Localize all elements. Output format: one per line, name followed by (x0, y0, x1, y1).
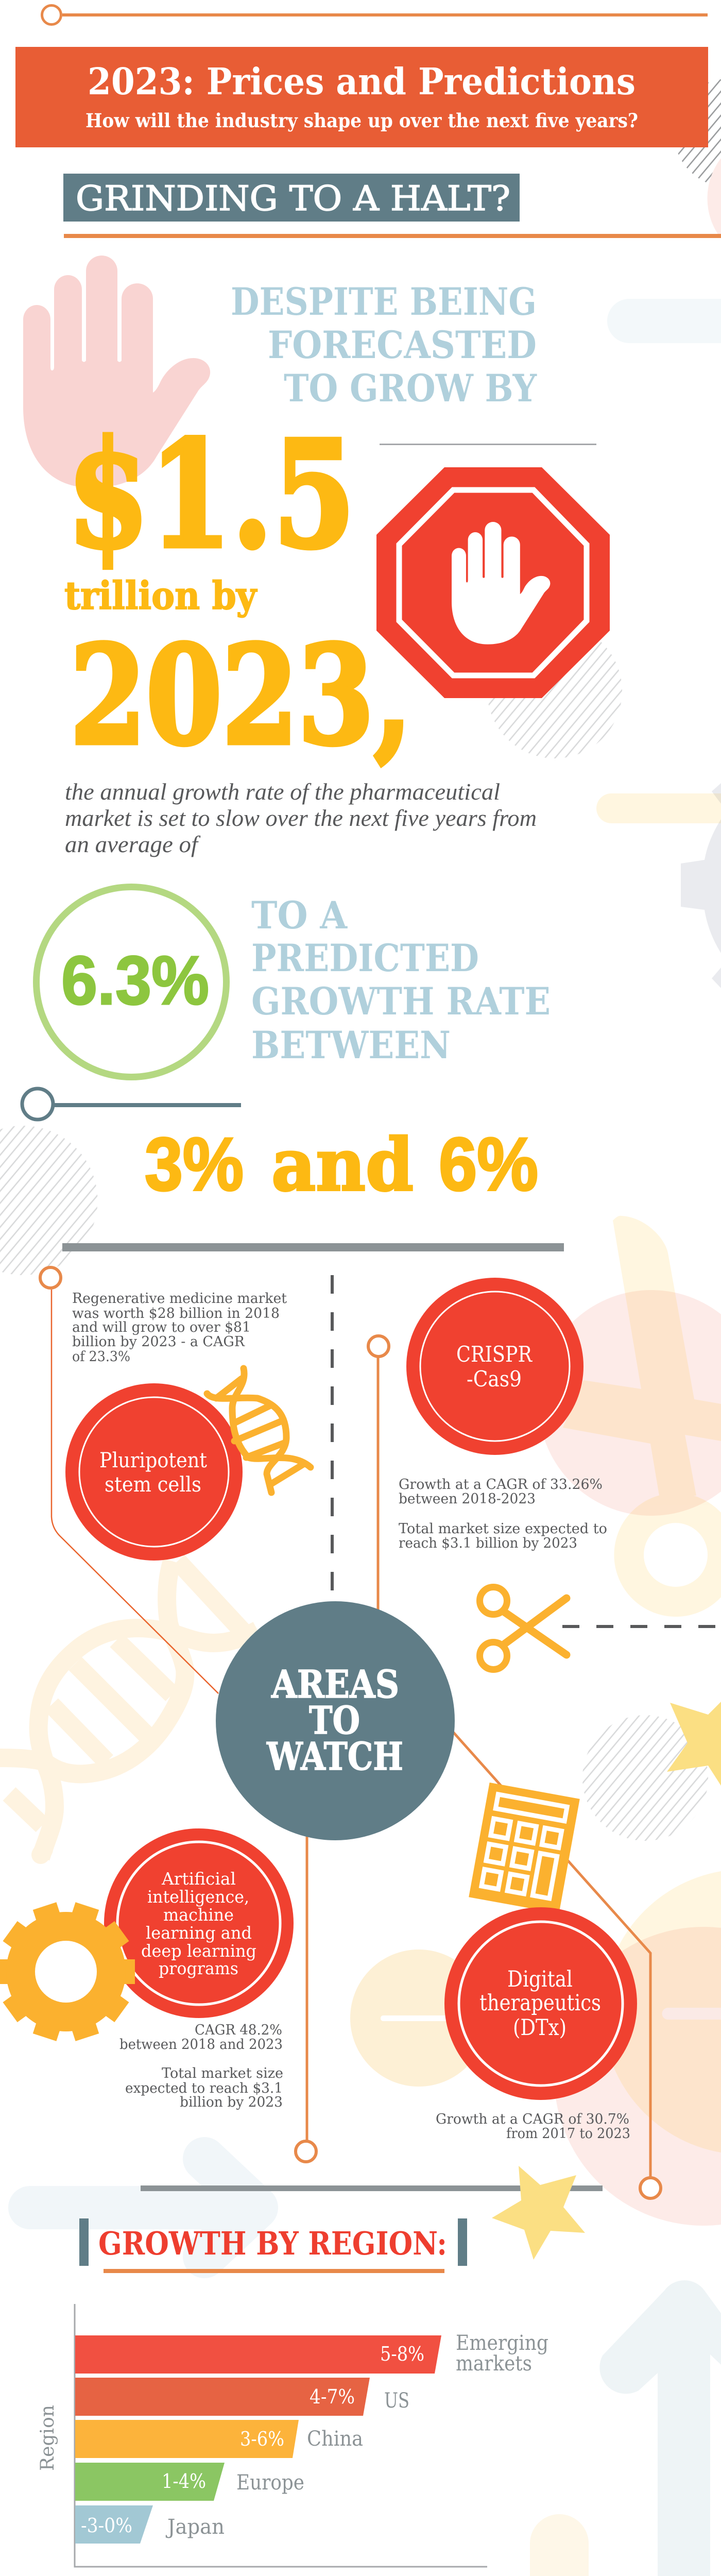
stat: 6.3% in green ring (36, 887, 227, 1077)
circle: artificial intelligence: machine (163, 1905, 234, 1925)
circle: artificial intelligence: learning and (146, 1923, 252, 1943)
text: regenerative medicine: of 23.3% (72, 1349, 130, 1365)
text: regenerative medicine: billion by 2023 - a CAGR (72, 1334, 245, 1350)
icon: yellow star (492, 2166, 585, 2260)
background: pale blue arrow right-pointing (30, 2159, 256, 2257)
circle: pluripotent stem cells (65, 1383, 243, 1561)
background: pale yellow capsule (596, 793, 721, 823)
connector: AI to centre (296, 1837, 316, 2162)
text: annual growth rate paragraph: the annual growth rate of the pharmaceutical (65, 778, 500, 805)
text: annual growth rate paragraph: an average of (65, 831, 201, 857)
chart axes (75, 2304, 487, 2567)
big number: $1.5: $1.5 (67, 409, 355, 581)
bar: China (75, 2420, 363, 2458)
grey section bar (62, 1243, 564, 1251)
text: regenerative medicine: was worth $28 billion in 2018 (72, 1306, 280, 1321)
background: hatched circle under stop sign (487, 623, 622, 758)
text: CRISPR growth: Growth at a CAGR of 33.26% (399, 1477, 603, 1493)
text: to a predicted growth rate between (251, 893, 551, 1067)
circle: artificial intelligence: programs (159, 1958, 238, 1978)
text: AI market: Total market size (162, 2065, 283, 2081)
text: regenerative medicine: and will grow to over $81 (72, 1319, 251, 1335)
bar: Japan: Japan (165, 2515, 225, 2539)
text: AI market: between 2018 and 2023 (119, 2037, 283, 2053)
bar: US: 4-7% (310, 2385, 355, 2408)
background: pale yellow down arrow (494, 2544, 626, 2576)
background: large pale DNA helix (0, 1561, 258, 1858)
circle: digital therapeutics (444, 1907, 637, 2100)
background: pale blue up arrow (599, 2280, 721, 2576)
text: to a predicted growth rate between: TO A (251, 893, 348, 938)
section heading: grinding to a halt: GRINDING TO A HALT? (76, 179, 510, 218)
background: pale blue capsule (607, 299, 721, 343)
text: digital therapeutics growth (436, 2111, 630, 2142)
bar: emerging markets: Emerging (456, 2331, 548, 2355)
text: trillion by: trillion by (64, 574, 258, 618)
text: despite being forecasted to grow by: DESPITE BEING (231, 280, 537, 324)
grey section bar (141, 2185, 603, 2191)
circle: areas to watch: TO (309, 1699, 360, 1743)
circle: pluripotent stem cells: Pluripotent (99, 1449, 207, 1472)
circle: digital therapeutics: Digital (507, 1967, 573, 1992)
text: digital therapeutics growth: from 2017 to 2023 (506, 2126, 630, 2142)
bar: US (75, 2378, 409, 2416)
bar: Europe (75, 2463, 304, 2501)
stat: 3% and 6%: and (271, 1123, 414, 1208)
background: yellow star right edge (667, 1702, 721, 1786)
title banner (15, 47, 708, 147)
heading: growth by region: GROWTH BY REGION: (98, 2225, 447, 2262)
text: AI market (119, 2022, 283, 2110)
background: hatched circle left (0, 1126, 98, 1275)
bar: Japan (75, 2505, 225, 2544)
background: hatched circle right (582, 1715, 708, 1841)
icon: big pale hand (23, 256, 210, 488)
connector: digital therapeutics to centre (453, 1732, 661, 2198)
text: to a predicted growth rate between: GROWTH RATE (251, 979, 551, 1024)
circle: areas to watch (216, 1601, 455, 1840)
short grey rule (380, 444, 596, 445)
background: large pale scissors (563, 1216, 721, 1617)
text: despite being forecasted to grow by (231, 280, 537, 411)
text: AI market: CAGR 48.2% (195, 2022, 282, 2038)
teal ring and rule (22, 1089, 241, 1120)
text: digital therapeutics growth: Growth at a CAGR of 30.7% (436, 2111, 629, 2127)
connector: pluripotent to centre (40, 1267, 218, 1693)
title: 2023: Prices and Predictions (88, 60, 636, 103)
text: AI market: billion by 2023 (180, 2094, 283, 2110)
circle: CRISPR-Cas9: CRISPR (456, 1342, 533, 1367)
text: CRISPR growth (399, 1477, 607, 1551)
bar: China: China (307, 2427, 363, 2451)
vertical dashed divider (331, 1275, 334, 1592)
icon: scissors (480, 1587, 566, 1669)
icon: gear (0, 1902, 135, 2041)
bar: emerging markets: markets (456, 2352, 532, 2376)
text: despite being forecasted to grow by: TO GROW BY (284, 366, 537, 411)
bar: emerging markets: 5-8% (380, 2343, 424, 2365)
background: grey gear right (681, 783, 721, 988)
circle: artificial intelligence (104, 1828, 294, 2018)
text: to a predicted growth rate between: PREDICTED (251, 936, 479, 980)
stat: 6.3% in green ring: 6.3% (61, 942, 209, 1019)
background: overlapping yellow and pink circles (554, 1871, 721, 2226)
bar: US: US (384, 2389, 409, 2413)
heading: growth by region (79, 2218, 467, 2273)
stat: 3% and 6%: 3% (145, 1122, 244, 1206)
text: regenerative medicine (72, 1291, 287, 1365)
circle: areas to watch: AREAS (271, 1663, 399, 1707)
icon: stop sign with hand (376, 467, 610, 698)
stat: 3% and 6%: 6% (439, 1122, 538, 1206)
icon: DNA (207, 1368, 311, 1493)
circle: digital therapeutics: (DTx) (513, 2015, 566, 2041)
circle: pluripotent stem cells: stem cells (105, 1473, 201, 1497)
background: pink circle top right (707, 158, 721, 239)
text: CRISPR growth: reach $3.1 billion by 2023 (399, 1535, 577, 1551)
bar: Europe: 1-4% (162, 2470, 206, 2493)
text: despite being forecasted to grow by: FORECASTED (268, 323, 537, 367)
text: AI market: expected to reach $3.1 (125, 2080, 283, 2096)
subtitle: How will the industry shape up over the next five years? (85, 109, 638, 132)
text: annual growth rate paragraph (65, 778, 537, 857)
text: annual growth rate paragraph: market is set to slow over the next five years from (65, 805, 537, 831)
bar chart: growth by region (37, 2304, 548, 2576)
bar: Japan: -3-0% (81, 2514, 132, 2537)
text: to a predicted growth rate between: BETWEEN (251, 1023, 451, 1067)
big number: 2023: 2023, (70, 616, 412, 775)
horizontal dashes (562, 1625, 721, 1628)
bar: emerging markets (75, 2331, 548, 2376)
connector: CRISPR to centre (368, 1336, 389, 1610)
bar: China: 3-6% (240, 2428, 284, 2450)
bar: Europe: Europe (236, 2471, 304, 2495)
circle: artificial intelligence: intelligence, (147, 1887, 249, 1907)
section heading: grinding to a halt (63, 174, 721, 238)
text: CRISPR growth: between 2018-2023 (399, 1491, 536, 1507)
background: pink circle by CRISPR (538, 1290, 721, 1516)
icon: calculator (469, 1783, 580, 1913)
circle: artificial intelligence: Artificial (161, 1869, 236, 1889)
text: regenerative medicine: Regenerative medicine market (72, 1291, 287, 1307)
circle: areas to watch: WATCH (266, 1735, 403, 1779)
circle: artificial intelligence: deep learning (141, 1941, 256, 1961)
top ring and rule (42, 5, 708, 25)
y axis title: Region (37, 2405, 58, 2471)
background: pale pill circle (350, 1950, 487, 2087)
circle: digital therapeutics: therapeutics (479, 1990, 601, 2016)
circle: CRISPR-Cas9 (406, 1278, 583, 1455)
circle: CRISPR-Cas9: -Cas9 (467, 1366, 522, 1392)
text: CRISPR growth: Total market size expected to (399, 1521, 607, 1537)
background: hatched circle top right (674, 79, 721, 187)
